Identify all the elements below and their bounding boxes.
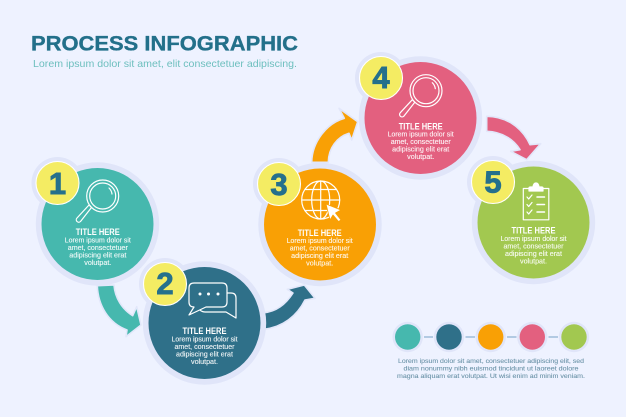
arrow: step 2 to step 3 (264, 285, 315, 329)
step 2 text (172, 326, 238, 366)
step 2 text: adipiscing elit erat (176, 350, 233, 358)
title: PROCESS INFOGRAPHIC (31, 32, 298, 56)
legend text: Lorem ipsum dolor sit amet, consectetuer adipiscing elit, sed (398, 358, 584, 365)
icon: chat bubbles (189, 283, 236, 318)
panel: step 2 (139, 258, 266, 385)
step 5 text: volutpat. (520, 258, 547, 266)
step 4 text (388, 122, 454, 161)
icon: clipboard checklist (523, 183, 549, 220)
step 3 text: TITLE HERE (298, 228, 342, 238)
legend text (397, 358, 585, 380)
step 1 text: amet, consectetuer (68, 244, 128, 252)
number badge 2: 2 (156, 266, 174, 301)
step 3 text: Lorem ipsum dolor sit (287, 237, 353, 245)
arrow: step 1 to step 2 (97, 285, 141, 337)
step 1 text: adipiscing elit erat (69, 251, 126, 259)
arrow: step 3 to step 4 (312, 108, 358, 162)
icon: globe with cursor (302, 181, 341, 222)
step 4 text: adipiscing elit erat (392, 145, 449, 153)
step 1 text (65, 227, 131, 267)
step 4 text: amet, consectetuer (391, 138, 451, 146)
arrow: step 4 to step 5 (487, 116, 541, 160)
step 2 text: amet, consectetuer (174, 343, 235, 351)
step 1 text: Lorem ipsum dolor sit (65, 237, 131, 245)
step 2 text: TITLE HERE (182, 326, 226, 336)
step 5 text: TITLE HERE (512, 226, 556, 236)
step 4 text: Lorem ipsum dolor sit (388, 131, 454, 139)
step 3 text: volutpat. (306, 260, 333, 268)
step 2 text: Lorem ipsum dolor sit (172, 336, 238, 344)
step 5 text: adipiscing elit erat (505, 250, 562, 258)
step 3 text (287, 228, 353, 268)
step 5 text: Lorem ipsum dolor sit (500, 235, 567, 243)
step 3 text: amet, consectetuer (290, 244, 350, 252)
step 1 text: volutpat. (84, 259, 111, 267)
panel: step 5 (467, 156, 595, 284)
number badge 5: 5 (484, 165, 502, 200)
step 5 text (500, 226, 567, 266)
panel: step 1 (32, 157, 159, 286)
step 2 text: volutpat. (191, 358, 218, 366)
icon: magnifier (76, 180, 119, 222)
subtitle: Lorem ipsum dolor sit amet, elit consectetuer adipiscing. (33, 59, 297, 70)
number badge 3: 3 (270, 167, 288, 202)
step 4 text: volutpat. (407, 153, 434, 161)
step 1 text: TITLE HERE (76, 227, 120, 237)
panel: step 4 (355, 52, 482, 180)
panel: step 3 (253, 158, 382, 286)
step 3 text: adipiscing elit erat (291, 252, 348, 260)
legend text: magna aliquam erat volutpat. Ut wisi enim ad minim veniam. (397, 373, 585, 380)
legend text: diam nonummy nibh euismod tincidunt ut laoreet dolore (404, 366, 579, 372)
number badge 4: 4 (372, 60, 390, 95)
legend: colour dots (392, 322, 589, 352)
step 4 text: TITLE HERE (399, 122, 443, 132)
step 5 text: amet, consectetuer (504, 242, 564, 250)
icon: magnifier (400, 75, 442, 117)
number badge 1: 1 (49, 166, 66, 201)
